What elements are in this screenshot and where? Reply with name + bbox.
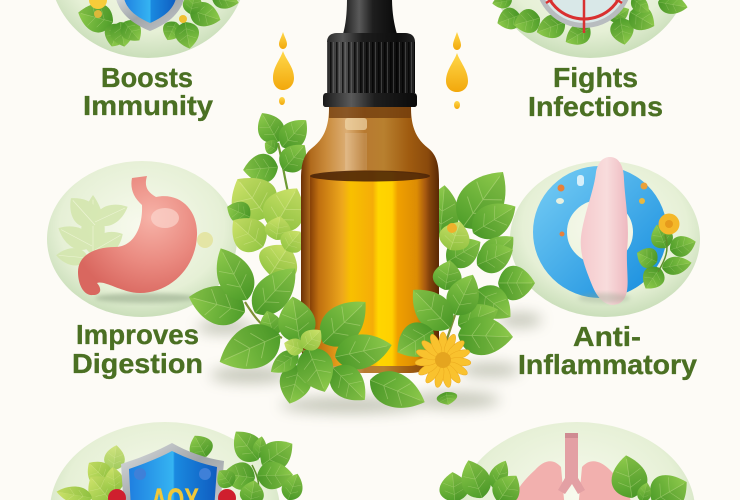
icon: lungs with leaves bbox=[438, 433, 696, 500]
panel: boosts immunity bbox=[50, 0, 246, 121]
icon: blue ring and pale inflamed tissue bbox=[550, 157, 699, 305]
icon: yellow daisy bbox=[415, 332, 471, 388]
foliage in front of bottle bbox=[184, 240, 535, 418]
heading: Anti- bbox=[573, 321, 641, 352]
dropper bottle bbox=[301, 0, 439, 373]
panel: improves digestion bbox=[47, 161, 237, 379]
heading bbox=[72, 319, 203, 379]
badge background bbox=[510, 161, 700, 317]
heading bbox=[518, 321, 697, 380]
heading: Fights bbox=[553, 62, 638, 93]
heading: Infections bbox=[528, 91, 663, 122]
shadows under central foliage bbox=[197, 313, 542, 413]
panel: anti-inflammatory bbox=[510, 157, 700, 380]
panel: respiratory support (bottom right) bbox=[438, 422, 696, 500]
badge background bbox=[491, 0, 689, 58]
badge background bbox=[47, 161, 237, 317]
heading: Boosts bbox=[101, 62, 193, 93]
right oil drops bbox=[446, 32, 468, 109]
heading: Improves bbox=[76, 319, 199, 350]
glass bottle body bbox=[301, 107, 439, 373]
icon: crosshair target dial with leaves bbox=[491, 0, 689, 51]
foliage behind bottle bbox=[218, 107, 524, 286]
badge background bbox=[459, 422, 695, 500]
icon: stomach bbox=[78, 176, 197, 303]
heading: Immunity bbox=[83, 90, 213, 121]
panel: antioxidant shield (bottom left) bbox=[50, 422, 307, 500]
badge background bbox=[50, 0, 246, 58]
collar bbox=[323, 93, 417, 107]
heading bbox=[83, 62, 213, 121]
rubber bulb bbox=[343, 0, 397, 34]
heading: Inflammatory bbox=[518, 349, 697, 380]
ribbed cap bbox=[327, 33, 415, 93]
left oil drops bbox=[273, 32, 294, 105]
icon: silver and blue shield with leaves bbox=[74, 0, 240, 51]
amber oil bbox=[310, 172, 430, 366]
heading bbox=[528, 62, 663, 122]
badge background bbox=[50, 422, 280, 500]
icon: AOX shield with leaves and berries bbox=[55, 423, 307, 500]
panel: fights infections bbox=[491, 0, 689, 122]
faded leaves behind stomach bbox=[54, 190, 213, 267]
heading: Digestion bbox=[72, 348, 203, 379]
